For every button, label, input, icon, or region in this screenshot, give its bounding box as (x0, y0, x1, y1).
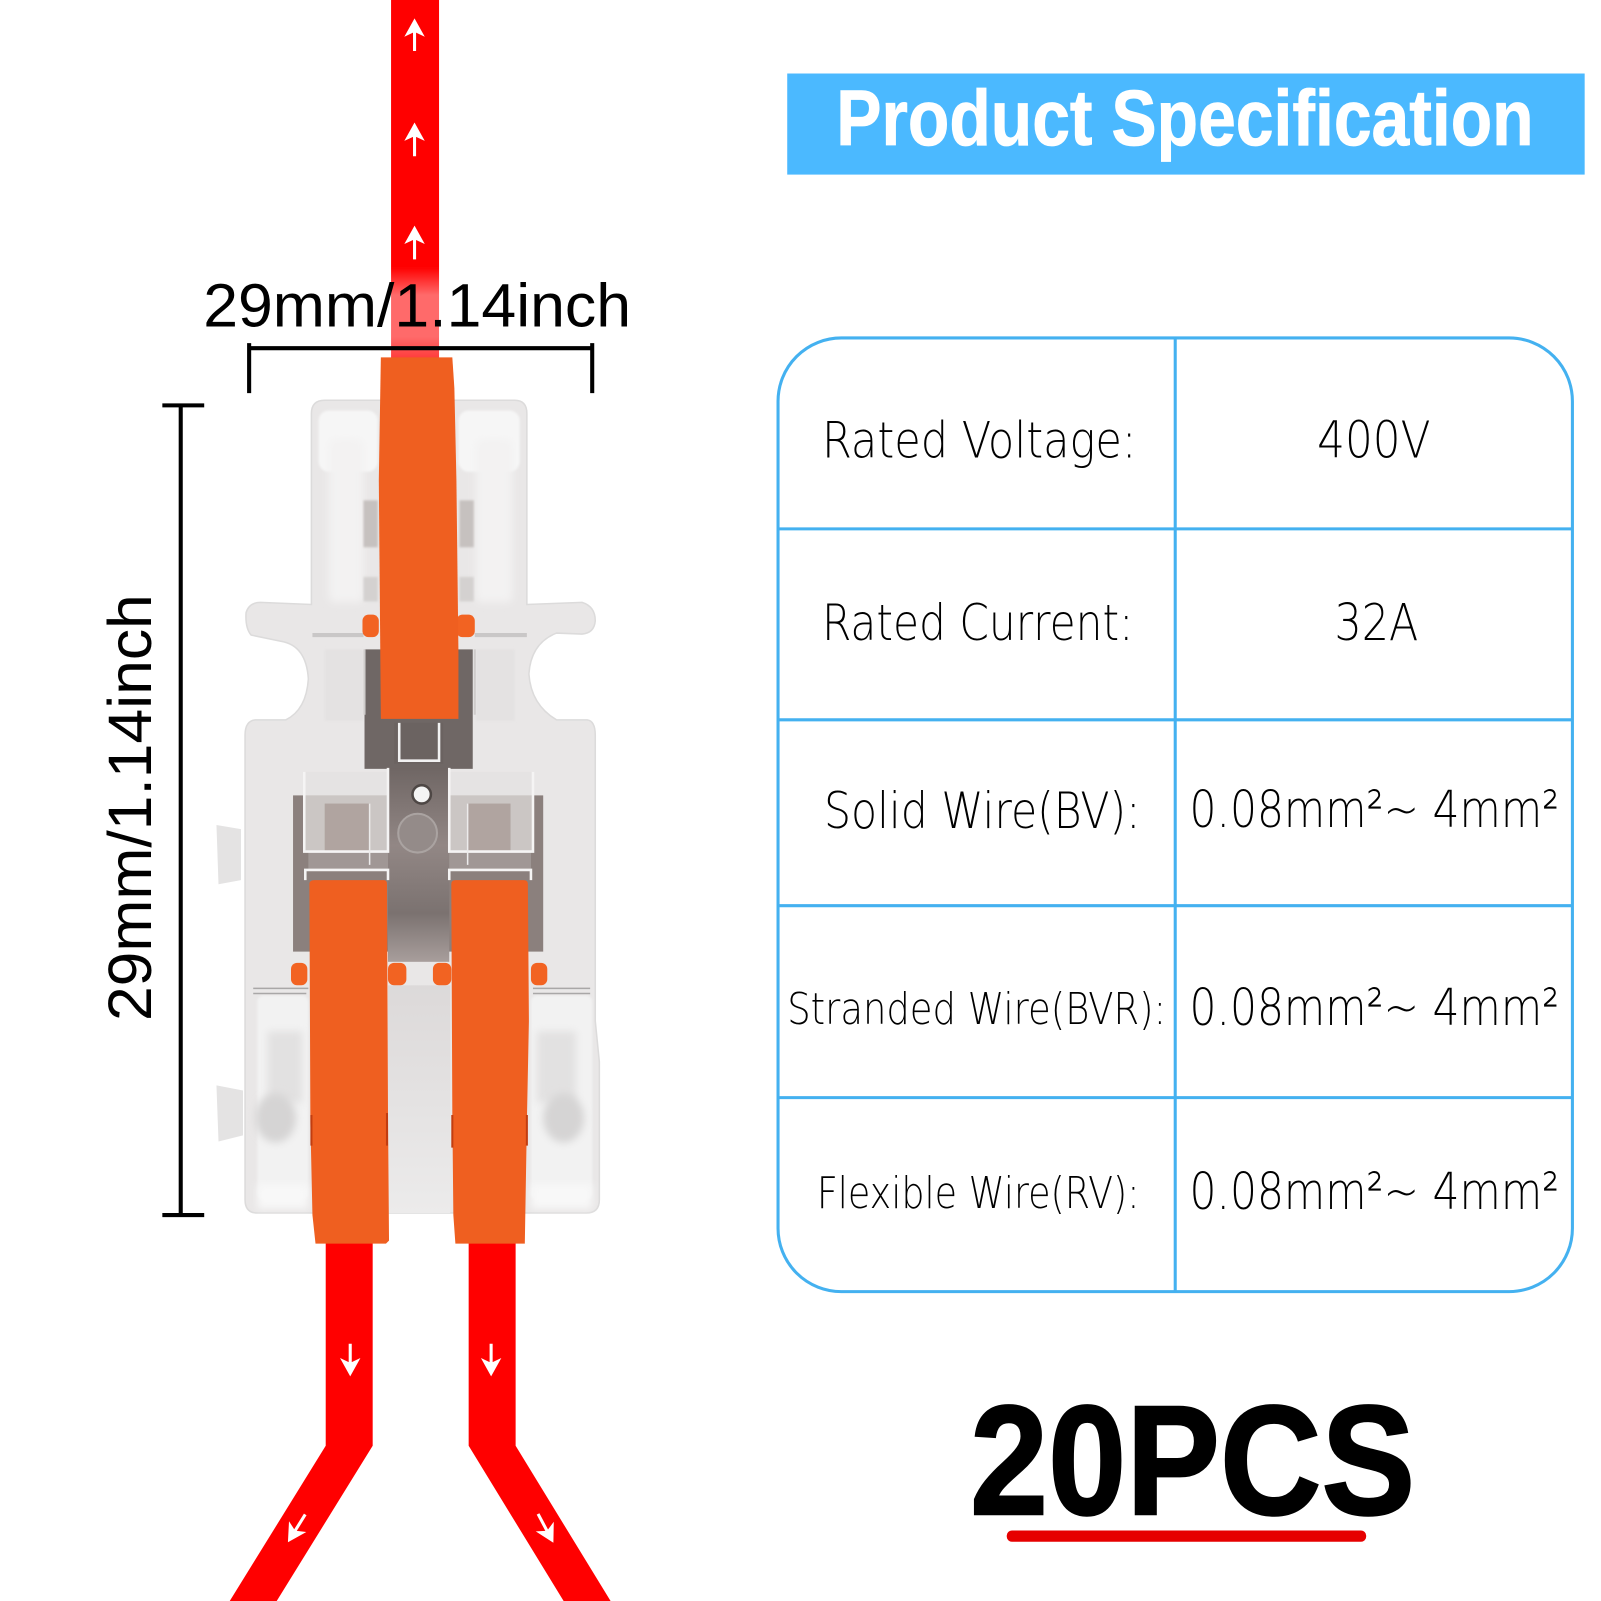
row: rated voltage: Rated Voltage: (822, 411, 1136, 469)
orange dots (362, 615, 379, 637)
red wire: top (391, 0, 439, 359)
rivet (413, 785, 431, 804)
specification table (778, 338, 1572, 1292)
orange lever: bottom left (309, 880, 389, 1244)
row: rated voltage (822, 411, 1430, 470)
row: rated voltage: 400V (1317, 411, 1430, 470)
quantity underline (1007, 1531, 1366, 1542)
arrow: up 1 (404, 18, 425, 51)
row: solid wire (824, 781, 1559, 840)
arrow: up 2 (404, 123, 425, 156)
arrow: down (340, 1344, 360, 1376)
embossed circle (398, 814, 437, 853)
orange lever: bottom right (451, 880, 529, 1244)
height label: 29mm/1.14inch (96, 594, 164, 1021)
row: rated current (822, 594, 1418, 653)
row: flexible wire: Flexible Wire(RV): (817, 1168, 1139, 1219)
lower windows (257, 996, 308, 1200)
row: flexible wire (817, 1163, 1559, 1222)
width label: 29mm/1.14inch (203, 272, 631, 340)
lever notches (311, 1113, 527, 1148)
red wire: bottom left (230, 1241, 373, 1601)
metal bus bar (293, 795, 543, 952)
heading banner (787, 74, 1585, 175)
arrow: diagonal left (279, 1509, 314, 1548)
top windows (319, 410, 378, 472)
row: rated current: 32A (1335, 594, 1418, 653)
dimension: height (96, 405, 204, 1215)
rib lines (253, 988, 590, 993)
arrow: up 3 (404, 226, 425, 259)
clear housing (245, 400, 599, 1213)
row: stranded wire (787, 979, 1559, 1038)
row: rated current: Rated Current: (822, 594, 1133, 652)
side tabs (216, 825, 243, 1142)
row: stranded wire: Stranded Wire(BVR): (787, 984, 1166, 1035)
arrow: down (481, 1344, 501, 1376)
red wire: bottom right (469, 1241, 611, 1601)
quantity label: 20PCS (970, 1374, 1415, 1548)
arrow: diagonal right (529, 1509, 562, 1548)
clear frames over metal (304, 772, 388, 795)
row: solid wire: Solid Wire(BV): (824, 782, 1141, 840)
connector: transparent body (216, 400, 599, 1213)
dimension: width (203, 272, 631, 393)
orange lever: top (379, 357, 458, 719)
clear column (325, 649, 363, 721)
